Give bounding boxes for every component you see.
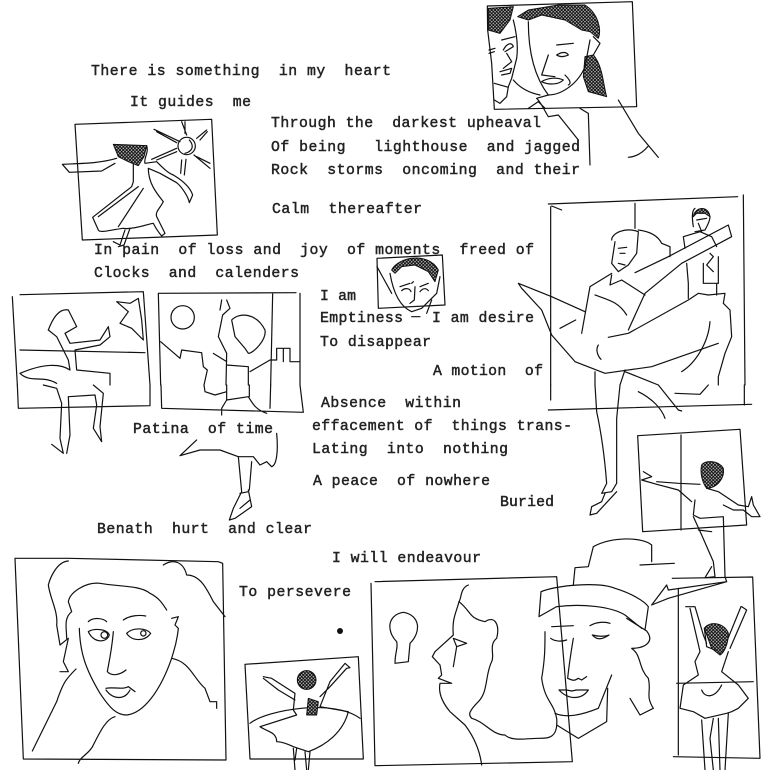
poem line 7: In pain of loss and joy of moments freed of (94, 243, 534, 259)
poem line 8: Clocks and calenders (94, 266, 299, 282)
poem line 2: It guides me (130, 95, 251, 111)
poem line 18: Buried (500, 495, 554, 511)
poem line 5: Rock storms oncoming and their (271, 163, 580, 179)
panel: dancer in window, upper right (638, 429, 760, 605)
poem line 6: Calm thereafter (272, 202, 422, 218)
hat woman's face (551, 622, 612, 738)
icon: ink dot (337, 628, 343, 634)
panel: woman portrait (15, 558, 226, 763)
poem text (91, 64, 580, 601)
poem line 10 end: I am desire (432, 311, 534, 327)
poem line 15: effacement of things trans- (312, 419, 572, 435)
poem line 13: Absence within (321, 396, 461, 412)
poem line 11: To disappear (320, 335, 431, 351)
hat (539, 539, 674, 630)
poem line 4: Of being lighthouse and jagged (271, 140, 580, 156)
panel: man's face with bindi (377, 255, 445, 317)
panel: ballerina with raised arms, lower right (672, 577, 760, 770)
panel: two faces (487, 2, 658, 165)
poem line 20: I will endeavour (332, 551, 481, 567)
panel: dancer with moon and skyline (158, 293, 303, 415)
poem line 1: There is something in my heart (91, 64, 391, 80)
poem line 3: Through the darkest upheaval (271, 116, 541, 132)
large dancer lower part (548, 385, 752, 515)
profile face (432, 585, 482, 765)
panel: large dancer with man (518, 195, 752, 515)
poem line 19: Benath hurt and clear (97, 522, 312, 538)
figure: dancer leg beside Patina (180, 433, 277, 520)
moon panel upper part (158, 293, 300, 385)
poem line 14: Patina of time (133, 422, 273, 438)
panel: dancer with sun (62, 119, 217, 247)
panel: profile and woman in hat (371, 539, 674, 766)
hat woman's hair (627, 618, 653, 715)
moon panel lower part (161, 385, 303, 415)
icon: bulb shape (390, 612, 418, 663)
profile hair (459, 602, 557, 739)
poem line 17: A peace of nowhere (313, 474, 490, 490)
poem line 9: I am (320, 289, 356, 305)
large dancer upper part (518, 195, 745, 385)
poem line 10 start: Emptiness (320, 311, 403, 327)
panel: dancer with pale frame, left (12, 292, 150, 453)
poem line 12: A motion of (433, 364, 543, 380)
panel: small ballerina with arc (245, 657, 363, 770)
poem line 21: To persevere (239, 585, 351, 601)
left panel lower part (17, 385, 150, 453)
poem line 16: Lating into nothing (312, 442, 508, 458)
left panel upper part (12, 292, 150, 385)
